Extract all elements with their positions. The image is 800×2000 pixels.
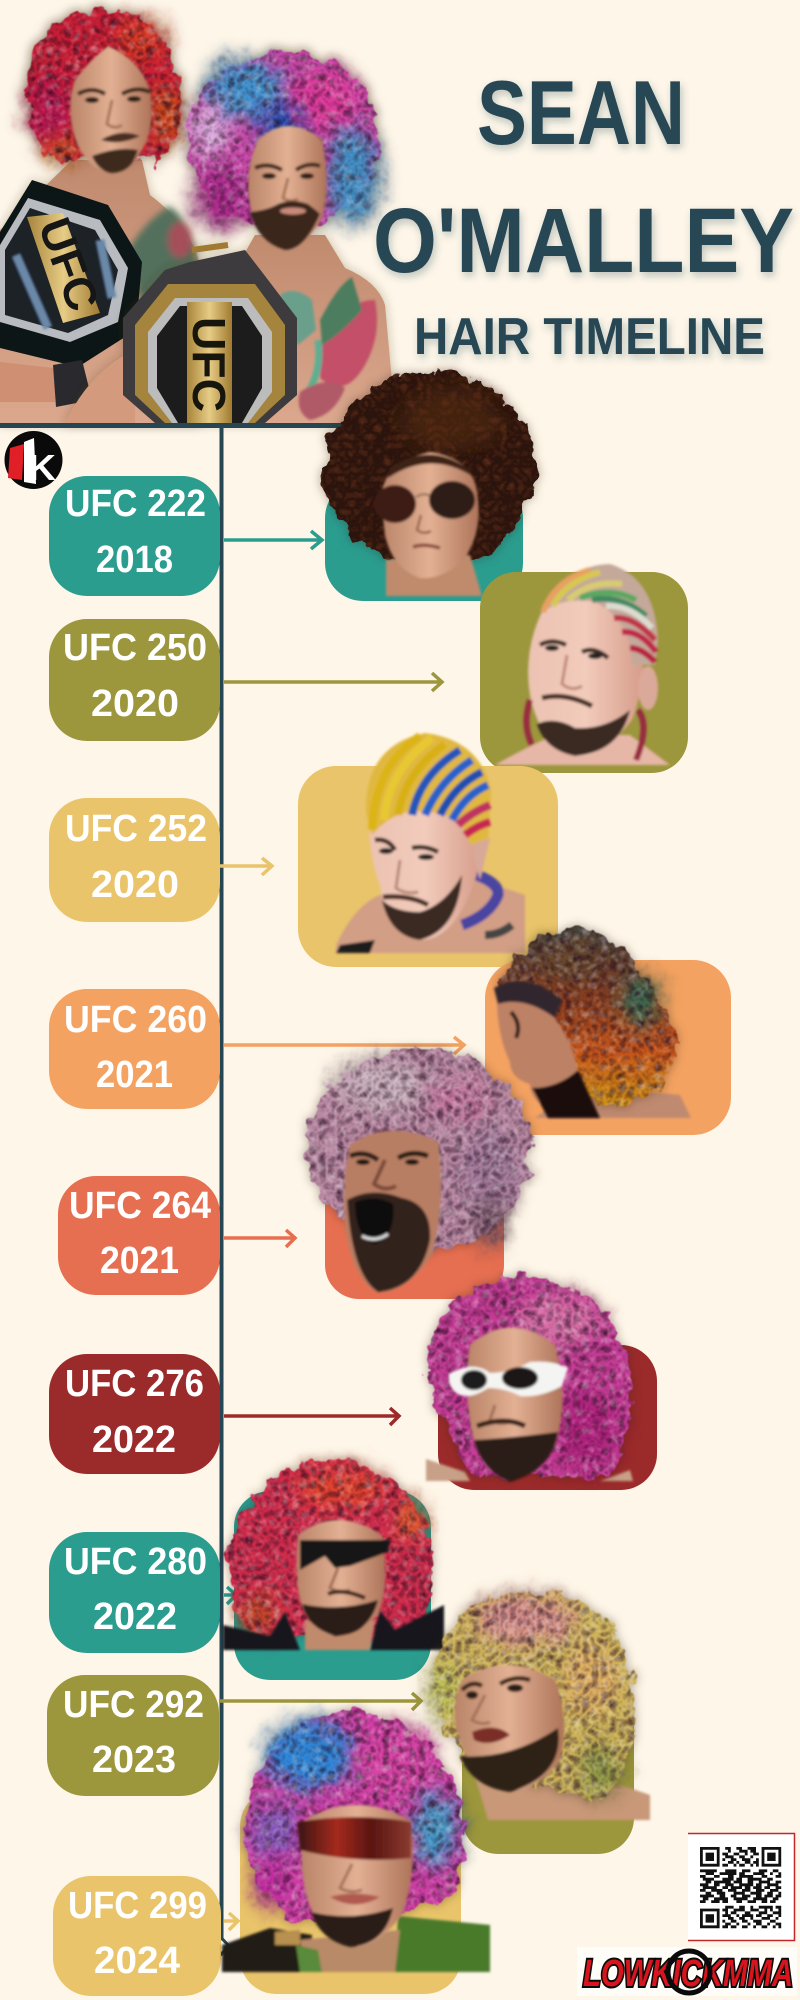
pill: UFC 292: UFC 292 [63, 1684, 204, 1726]
pill: UFC 260: UFC 260 [64, 999, 207, 1041]
panel: UFC 222 [325, 480, 523, 601]
belt [123, 245, 297, 423]
portrait: UFC 292 pastel rainbow curls [431, 1592, 650, 1820]
arrow: UFC 299 [224, 1913, 238, 1930]
QR code card [688, 1833, 795, 1941]
arrow: UFC 280 [224, 1587, 236, 1604]
torso [132, 235, 396, 425]
pill: UFC 292 [47, 1675, 219, 1796]
pill: UFC 252: 2020 [91, 864, 179, 906]
torso [0, 160, 200, 425]
panel: UFC 264 [325, 1120, 504, 1299]
pill: UFC 299: UFC 299 [68, 1885, 207, 1927]
pill: UFC 222: 2018 [96, 539, 173, 581]
arrow: UFC 276 [224, 1408, 399, 1425]
pill: UFC 260: 2021 [96, 1054, 173, 1096]
portrait: UFC 260 rainbow curls in profile [494, 928, 691, 1118]
panel: UFC 280 [234, 1491, 431, 1680]
panel: UFC 260 [485, 960, 731, 1135]
portrait: UFC 299 blue-pink afro with red visor [222, 1708, 490, 1972]
arrow: UFC 260 [224, 1037, 464, 1054]
arm and wrist band [0, 360, 92, 407]
pill: UFC 299: 2024 [94, 1940, 180, 1982]
belt: UFC [183, 317, 235, 412]
pill: UFC 252 [49, 798, 220, 922]
pill: UFC 264: UFC 264 [69, 1185, 211, 1227]
pill: UFC 264 [58, 1176, 220, 1295]
panel: UFC 250 [480, 572, 688, 773]
arrow: UFC 264 [224, 1230, 295, 1247]
hair: blue and pink afro [188, 52, 380, 228]
small logo badge: K [28, 447, 56, 488]
arrow: UFC 292 [219, 1693, 421, 1710]
face [248, 126, 327, 250]
pill: UFC 252: UFC 252 [65, 808, 207, 850]
timeline axis [0, 423, 345, 1954]
QR code [700, 1848, 781, 1927]
pill: UFC 222: UFC 222 [65, 483, 206, 525]
title line: Sean: SEAN [477, 63, 685, 164]
hero photo: afro fighter with belt [64, 52, 396, 425]
pill: UFC 292: 2023 [92, 1739, 176, 1781]
portrait: UFC 280 red hair, black jacket [223, 1460, 444, 1650]
pill: UFC 276: 2022 [92, 1419, 176, 1461]
belt: UFC [29, 211, 109, 318]
panel: UFC 299 [240, 1790, 461, 1994]
panel: UFC 252 [298, 766, 558, 967]
tattoo: chest wing [280, 277, 377, 420]
small logo badge [4, 431, 62, 489]
portrait: UFC 250 rainbow cornrows [495, 564, 670, 765]
pill: UFC 250: 2020 [91, 683, 179, 725]
subtitle: HAIR TIMELINE [414, 308, 765, 366]
portrait: UFC 264 pastel pink curls, shouting [308, 1048, 532, 1292]
title [373, 63, 794, 366]
portrait: UFC 222 dark afro with sunglasses [324, 372, 536, 596]
pill: UFC 280: 2022 [93, 1596, 177, 1638]
belt [0, 180, 142, 367]
hair: red curls [25, 10, 180, 168]
arm [64, 350, 135, 425]
pill: UFC 222 [49, 476, 220, 596]
pill: UFC 280: UFC 280 [64, 1541, 207, 1583]
portrait: UFC 252 tricolor cornrows [336, 733, 525, 953]
pill: UFC 264: 2021 [100, 1240, 179, 1282]
pill: UFC 260 [49, 989, 220, 1109]
pill: UFC 250: UFC 250 [63, 627, 207, 669]
pill: UFC 280 [49, 1532, 220, 1653]
tattoo: shoulder [128, 207, 196, 300]
face [70, 46, 152, 173]
portrait: UFC 276 magenta hair and white sunglasses [426, 1275, 633, 1482]
hero photo: red-haired fighter with belt [0, 10, 200, 425]
pill: UFC 250 [49, 619, 220, 741]
arrow: UFC 250 [224, 673, 442, 691]
arrow: UFC 252 [219, 858, 272, 875]
pill: UFC 276 [49, 1354, 220, 1474]
pill: UFC 299 [53, 1876, 221, 1996]
panel: UFC 292 [462, 1690, 634, 1854]
panel: UFC 276 [438, 1345, 657, 1490]
pill: UFC 276: UFC 276 [65, 1363, 204, 1405]
arrow: UFC 222 [224, 531, 322, 549]
